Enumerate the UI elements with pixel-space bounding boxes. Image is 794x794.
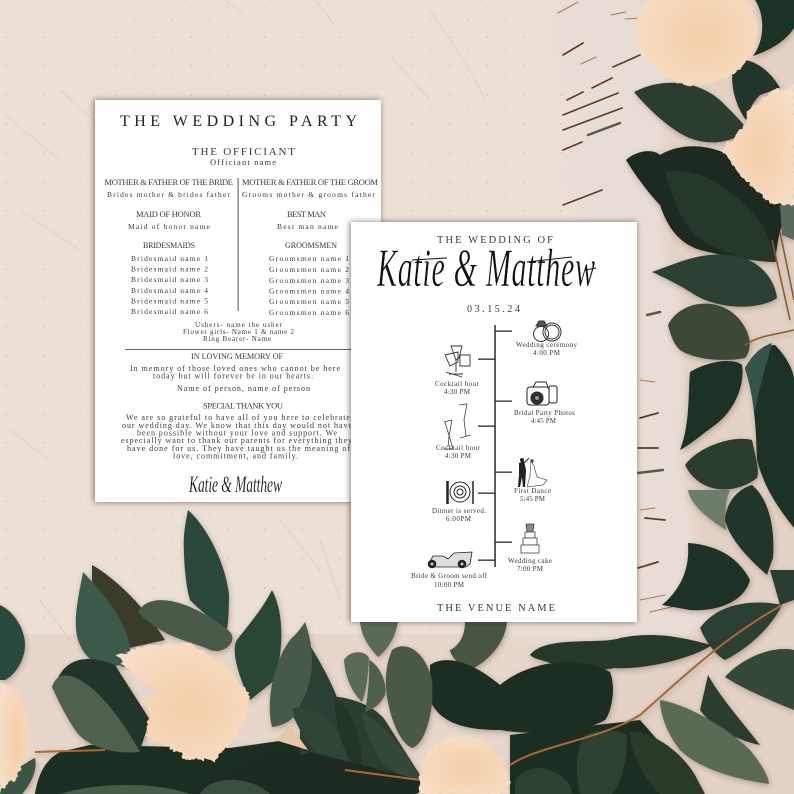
event: send off <box>411 572 488 589</box>
panel: the wedding party card <box>95 100 381 502</box>
groomsmen list: Groomsmen name 1 <box>269 254 349 263</box>
event: dinner is served: Dinner is served. <box>432 507 486 515</box>
leaves: bottom cluster <box>0 510 794 794</box>
event: send off: Bride & Groom send off <box>411 572 488 580</box>
maid of honor <box>128 209 211 231</box>
officiant block: Officiant name <box>210 157 276 167</box>
event: send off: 10:00 PM <box>434 581 465 589</box>
icon: wedding rings <box>534 321 561 342</box>
timeline spine and branches <box>478 325 512 567</box>
in loving memory <box>130 352 340 393</box>
event: cocktail hour second: 4:30 PM <box>445 452 472 460</box>
heading: the wedding of: THE WEDDING OF <box>437 235 553 246</box>
fringe tassels <box>500 0 710 640</box>
in loving memory: IN LOVING MEMORY OF <box>191 352 283 361</box>
event: wedding cake: Wedding cake <box>508 557 552 565</box>
panel: timeline card <box>351 222 637 622</box>
in loving memory: today but will forever be in our hearts. <box>153 372 313 380</box>
icon: vintage car <box>428 552 472 568</box>
icon: dinner plate <box>448 481 473 504</box>
special thank you <box>121 401 352 460</box>
icon: champagne flutes <box>444 404 471 449</box>
special thank you: We are so grateful to have all of you here to celebrate <box>126 413 350 422</box>
maid of honor: MAID OF HONOR <box>136 209 201 219</box>
leaves: right side cluster <box>626 0 794 660</box>
flowers: bottom proteas <box>0 643 508 794</box>
event: cocktail hour: Cocktail hour <box>435 380 480 388</box>
heading: the wedding party: THE WEDDING PARTY <box>120 113 357 130</box>
icon: first dance couple <box>518 458 547 487</box>
ushers and attendants: Flower girls- Name 1 & name 2 <box>183 328 294 336</box>
parents of the bride: MOTHER & FATHER OF THE BRIDE <box>104 177 233 187</box>
officiant block: THE OFFICIANT <box>192 146 295 158</box>
date: 03.15.24 <box>467 304 520 315</box>
ushers and attendants <box>183 321 294 343</box>
special thank you: our wedding day. We know that this day would not have <box>122 421 352 430</box>
maid of honor: Maid of honor name <box>128 222 211 231</box>
signature: Katie & Matthew <box>188 472 282 498</box>
groomsmen list: Groomsmen name 6 <box>269 308 349 317</box>
special thank you: SPECIAL THANK YOU <box>203 401 283 411</box>
flowers: top right proteas <box>637 0 794 205</box>
event: first dance: 5:45 PM <box>520 495 546 503</box>
parents of the groom: Grooms mother & grooms father <box>242 190 376 199</box>
in loving memory: Name of person, name of person <box>177 384 310 393</box>
event: bridal party photos <box>514 409 575 425</box>
groomsmen list: Groomsmen name 3 <box>269 276 349 285</box>
best man: BEST MAN <box>287 209 326 219</box>
best man: Best man name <box>277 222 339 231</box>
bridesmaids list: Bridesmaid name 2 <box>131 264 208 274</box>
event: wedding cake: 7:00 PM <box>517 565 544 573</box>
parents of the bride <box>104 177 233 199</box>
best man <box>277 209 339 231</box>
groomsmen list: Groomsmen name 2 <box>269 265 349 274</box>
groomsmen list: GROOMSMEN <box>285 241 337 250</box>
groomsmen list: Groomsmen name 5 <box>269 297 349 306</box>
officiant block <box>192 146 295 167</box>
event: first dance <box>514 487 551 503</box>
special thank you: have done for us. They have taught us the meaning of <box>127 444 350 453</box>
event: cocktail hour <box>435 380 480 396</box>
bridesmaids list: BRIDESMAIDS <box>143 241 195 250</box>
event: bridal party photos: Bridal Party Photos <box>514 409 575 417</box>
event: wedding ceremony: 4:00 PM <box>533 349 561 357</box>
event: dinner is served <box>432 507 486 523</box>
bridesmaids list: Bridesmaid name 4 <box>131 286 208 295</box>
bridesmaids list: Bridesmaid name 5 <box>131 296 208 306</box>
script names: Katie & Matthew <box>376 239 595 298</box>
in loving memory: In memory of those loved ones who cannot be here <box>130 364 340 373</box>
event: wedding cake <box>508 557 552 573</box>
parents of the groom <box>242 177 378 199</box>
bridesmaids list: Bridesmaid name 1 <box>131 254 208 263</box>
footer: venue name: THE VENUE NAME <box>437 603 555 614</box>
ushers and attendants: Ushers- name the usher <box>195 321 283 329</box>
event: cocktail hour second: Cocktail hour <box>436 444 481 452</box>
parents of the groom: MOTHER & FATHER OF THE GROOM <box>242 177 378 187</box>
event: bridal party photos: 4:45 PM <box>531 417 557 425</box>
bridesmaids list: Bridesmaid name 6 <box>131 307 208 316</box>
ushers and attendants: Ring Bearer- Name <box>203 335 271 343</box>
icon: wedding cake <box>521 524 539 553</box>
event: dinner is served: 6:00PM <box>446 515 472 523</box>
special thank you: especially want to thank our parents for everything they <box>121 436 352 445</box>
icon: camera <box>527 382 557 405</box>
bridesmaids list: Bridesmaid name 3 <box>131 275 208 284</box>
special thank you: love, commitment, and family. <box>173 452 298 460</box>
groomsmen list: Groomsmen name 4 <box>269 286 349 296</box>
event: wedding ceremony <box>516 341 578 357</box>
parents of the bride: Brides mother & brides father <box>107 190 230 199</box>
event: cocktail hour second <box>436 444 481 460</box>
groomsmen list <box>269 241 349 317</box>
icon: cocktail glasses <box>445 346 470 377</box>
bridesmaids list <box>131 241 208 316</box>
event: first dance: First Dance <box>514 487 551 495</box>
event: wedding ceremony: Wedding ceremony <box>516 341 578 349</box>
event: cocktail hour: 4:30 PM <box>444 388 471 396</box>
special thank you: been possible without your love and support. We <box>137 428 337 438</box>
